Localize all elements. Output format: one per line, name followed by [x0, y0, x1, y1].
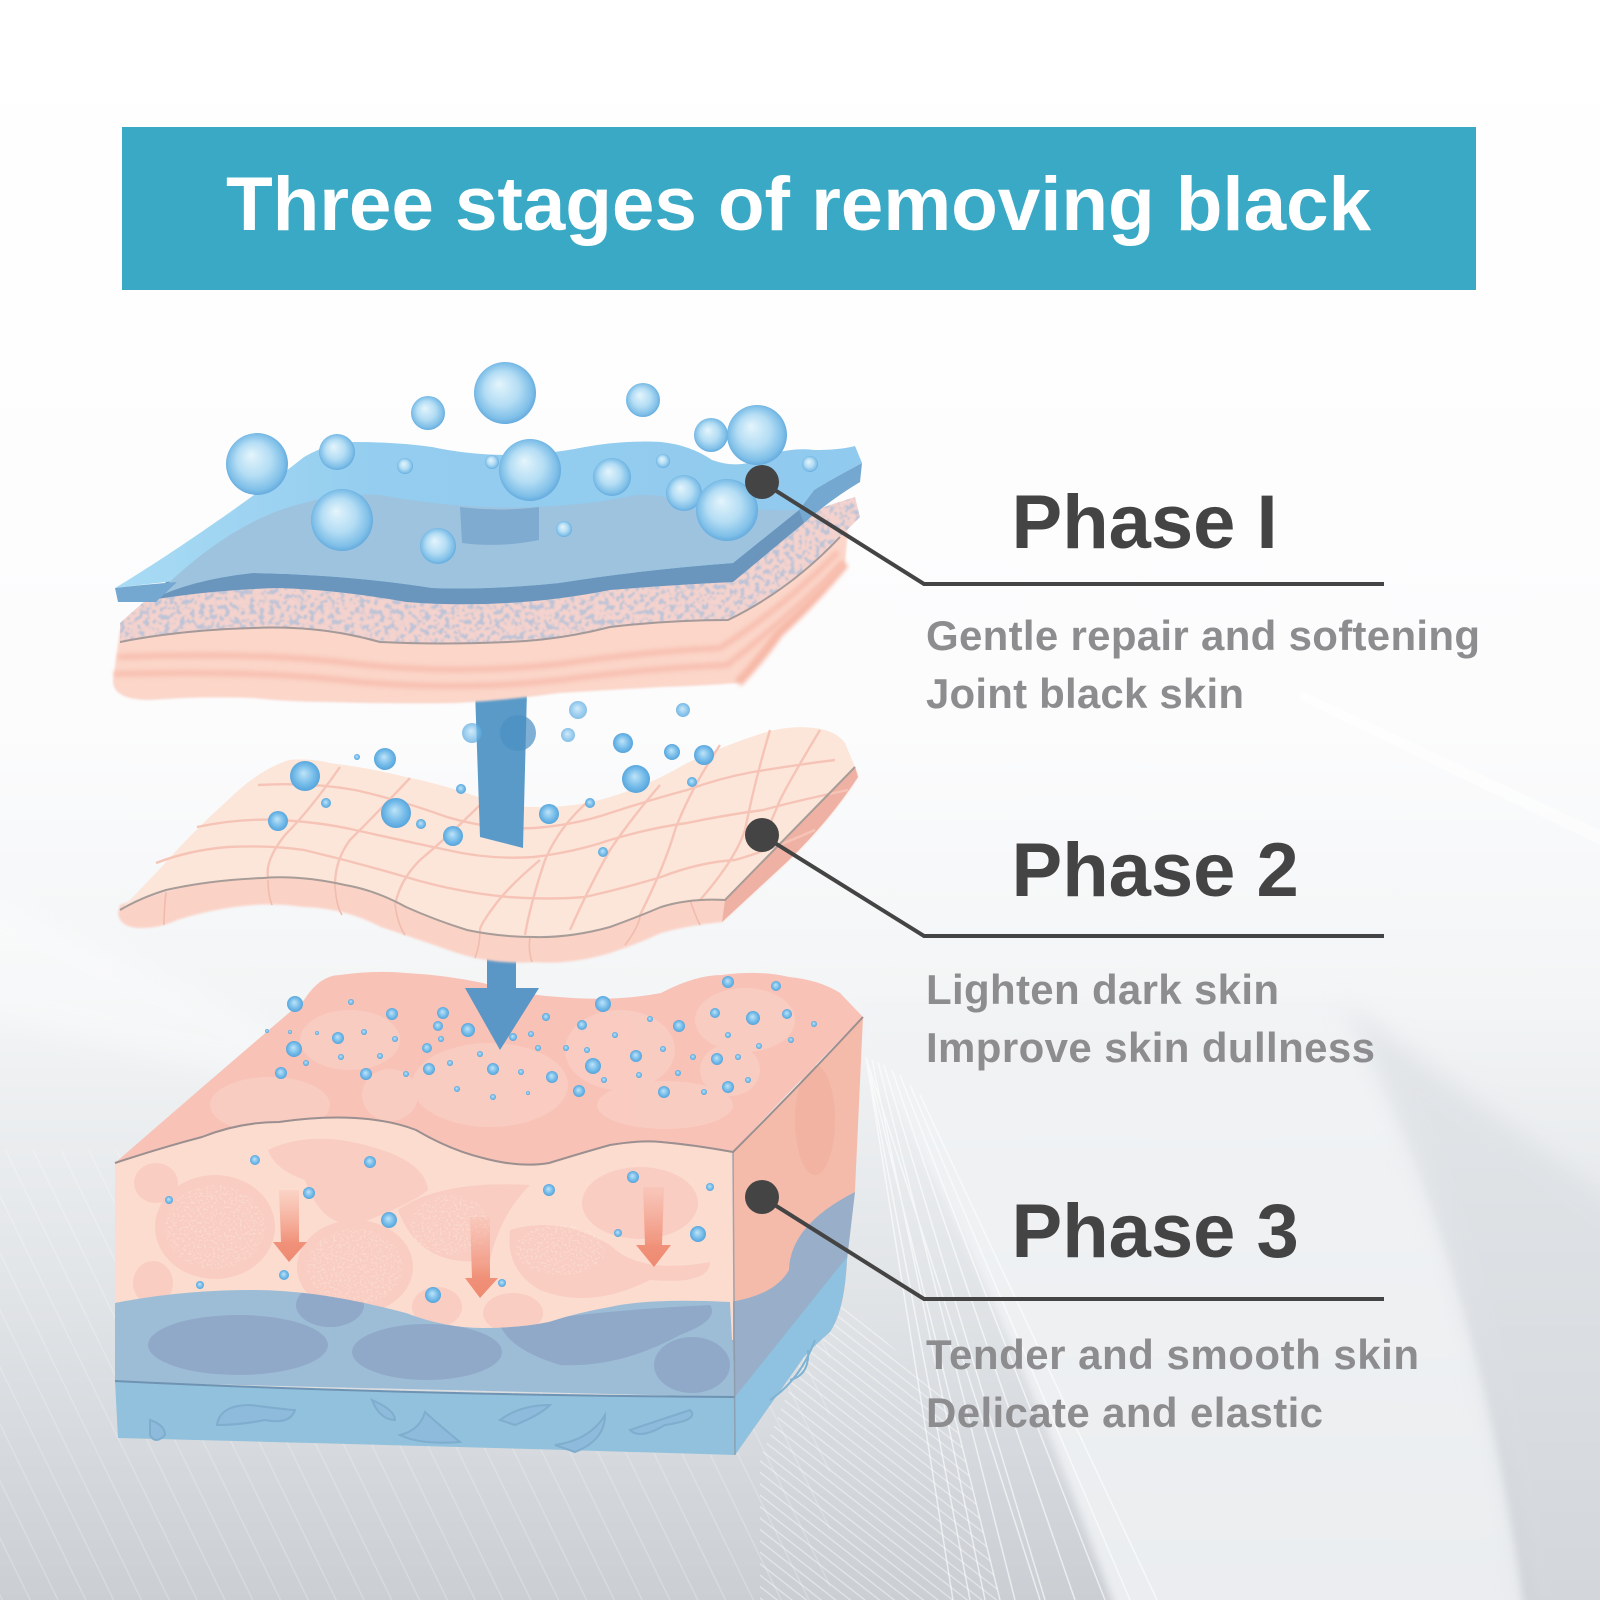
heading: phase 3: Phase 3 [1012, 1189, 1299, 1274]
translucent inner panel [151, 495, 799, 600]
text: phase I description [926, 612, 1480, 717]
arrow: pink down arrow 2 [465, 1217, 498, 1298]
callout: phase 2 leader [745, 818, 1384, 936]
block right side [730, 1017, 863, 1455]
speckled layer [120, 497, 860, 644]
callout: phase 3 leader [745, 1180, 1384, 1299]
text: phase 3 description: Delicate and elastic [926, 1389, 1323, 1436]
top surface droplets [265, 976, 817, 1100]
arrow: pink down arrow 1 [273, 1190, 307, 1262]
text: phase 3 description [926, 1331, 1419, 1436]
arrow: blue arrow into sheet [475, 690, 527, 848]
gel thickness edges [115, 463, 862, 602]
text: phase 2 description [926, 966, 1375, 1071]
front face droplets [165, 1155, 714, 1303]
text: phase 2 description: Improve skin dullness [926, 1024, 1375, 1071]
text: phase 3 description: Tender and smooth skin [926, 1331, 1419, 1378]
block blue base [115, 1152, 735, 1455]
pink base layer [113, 530, 848, 703]
arrow: blue arrow into bottom block [465, 950, 539, 1050]
rising bubbles [226, 362, 818, 564]
block blue dermis band [115, 1283, 735, 1397]
illustration: top skin layers [113, 362, 862, 703]
floating droplets around sheet [268, 701, 714, 857]
heading: phase I: Phase I [1012, 480, 1278, 565]
heading: phase 2: Phase 2 [1012, 828, 1299, 913]
block front pink face [115, 1110, 735, 1340]
callout: phase I leader [745, 465, 1384, 584]
illustration: middle grid sheet [118, 727, 858, 963]
block top surface [115, 972, 863, 1165]
text: phase 2 description: Lighten dark skin [926, 966, 1279, 1013]
dark blue band [151, 500, 804, 604]
illustration: bottom skin block [115, 972, 863, 1455]
text: phase I description: Gentle repair and softening [926, 612, 1480, 659]
block front skin outline [115, 1017, 863, 1165]
arrow stub under gel [460, 507, 539, 545]
arrow: pink down arrow 3 [636, 1187, 671, 1267]
text: phase I description: Joint black skin [926, 670, 1244, 717]
blue gel surface [115, 442, 862, 588]
title banner: Three stages of removing black [226, 162, 1371, 247]
title banner [122, 127, 1476, 290]
